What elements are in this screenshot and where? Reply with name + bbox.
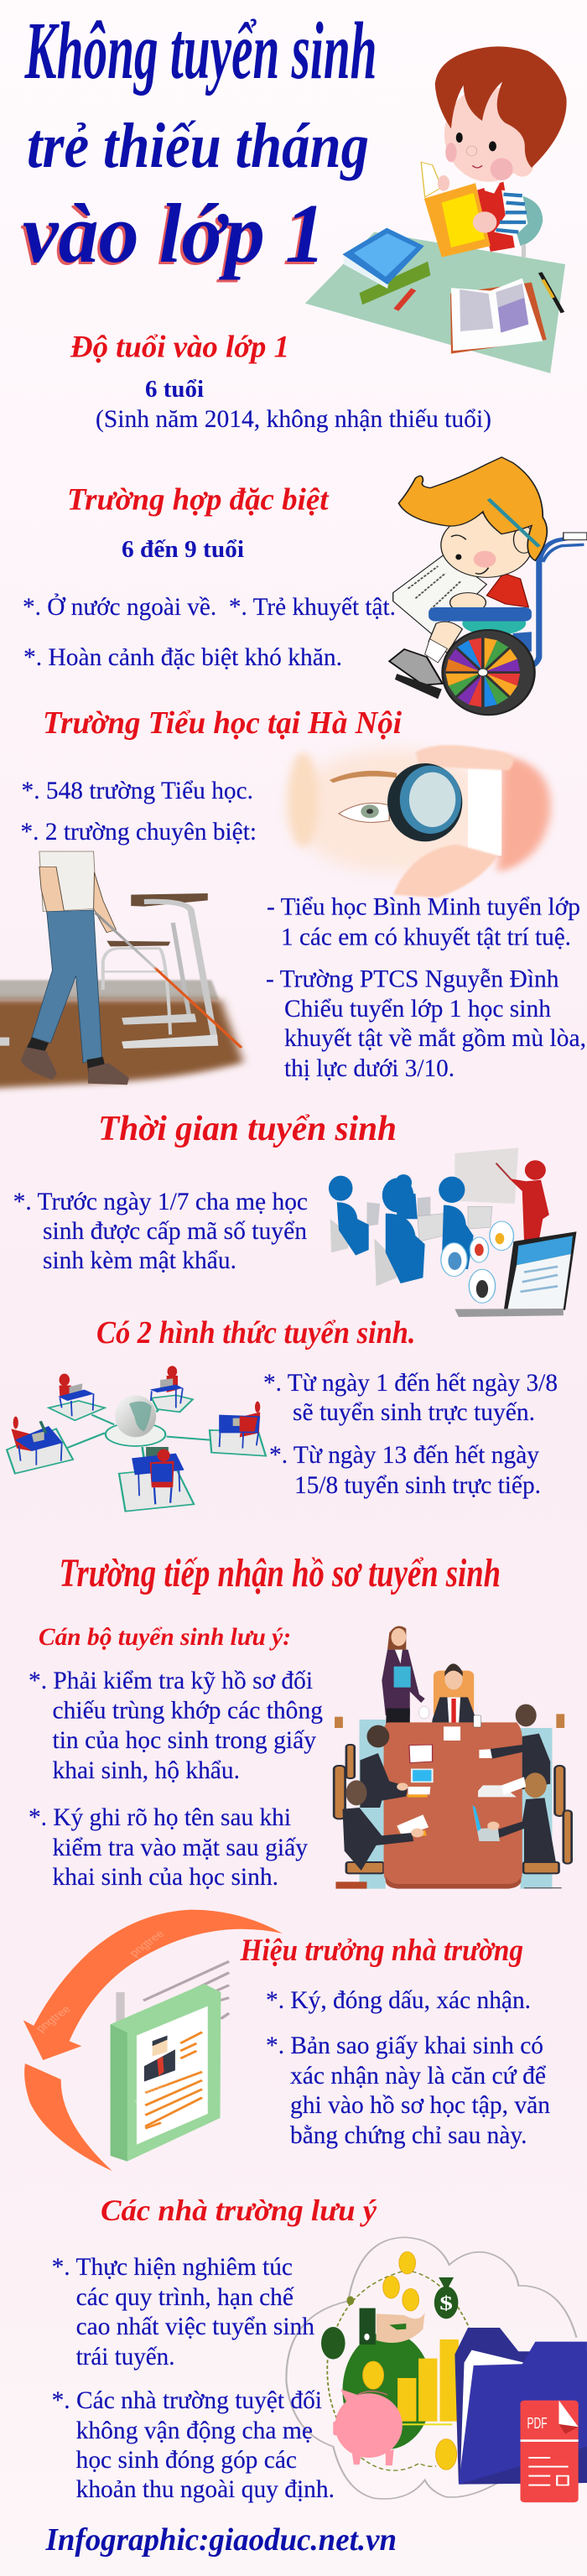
section: enrolment time xyxy=(13,1110,397,1274)
section: specialised schools list: - Trường PTCS Nguyễn Đình xyxy=(266,965,558,993)
section: enrolment officers note: tin của học sinh trong giấy xyxy=(52,1726,316,1754)
rainbow wheel spokes xyxy=(445,637,520,707)
section: enrolment officers note: kiểm tra vào mặt sau giấy xyxy=(52,1834,308,1861)
right desk xyxy=(219,1402,260,1449)
section: enrolment time: *. Trước ngày 1/7 cha mẹ học xyxy=(13,1188,308,1215)
section: schools note: học sinh đóng góp các xyxy=(76,2446,297,2474)
title: vào lớp 1 xyxy=(23,186,325,280)
top-left desk xyxy=(58,1374,94,1416)
section: two forms of enrolment xyxy=(96,1315,558,1499)
watermarks: pngtree xyxy=(127,1928,167,1959)
section: specialised schools list: Chiểu tuyển lớp 1 học sinh xyxy=(284,995,551,1023)
section: specialised schools list: - Tiểu học Bình Minh tuyển lớp xyxy=(267,893,580,921)
illustration: person walking with white cane xyxy=(0,851,243,1089)
section: enrolment officers note: *. Phải kiểm tra kỹ hồ sơ đối xyxy=(29,1667,313,1694)
section: schools note: cao nhất việc tuyển sinh xyxy=(76,2313,314,2340)
section: schools note: *. Các nhà trường tuyệt đối xyxy=(52,2386,322,2414)
bottom desk xyxy=(132,1447,184,1504)
PDF document icon: PDF xyxy=(527,2414,548,2432)
source credit: Infographic:giaoduc.net.vn xyxy=(45,2522,397,2558)
title: trẻ thiếu tháng xyxy=(27,111,369,181)
section: enrolment officers note: khai sinh của học sinh. xyxy=(52,1863,278,1891)
section: schools note: Các nhà trường lưu ý xyxy=(101,2194,377,2227)
illustration: eye with magnifying lens xyxy=(288,745,551,898)
section: two forms of enrolment: 15/8 tuyển sinh trực tiếp. xyxy=(294,1471,541,1499)
section: primary schools in Hanoi heading: *. 2 trường chuyên biệt: xyxy=(20,818,257,846)
section: primary schools in Hanoi heading xyxy=(20,705,402,846)
title xyxy=(23,6,377,280)
section: enrolment time: sinh được cấp mã số tuyển xyxy=(43,1217,307,1245)
standing woman with folder xyxy=(382,1626,425,1745)
section: primary schools in Hanoi heading: *. 548 trường Tiểu học. xyxy=(22,777,253,804)
section: schools note: *. Thực hiện nghiêm túc xyxy=(52,2253,293,2281)
section: special cases: 6 đến 9 tuổi xyxy=(122,537,244,563)
illustration: résumé document panel xyxy=(33,1928,229,2162)
section: enrolment officers note: Cán bộ tuyển sinh lưu ý: xyxy=(39,1623,291,1651)
man at head of the table xyxy=(430,1663,477,1736)
section: age for first grade: 6 tuổi xyxy=(145,377,204,403)
section: enrolment officers note: chiếu trùng khớp các thông xyxy=(52,1696,323,1725)
section: schools note: không vận động cha mẹ xyxy=(76,2417,313,2444)
section: special cases: Trường hợp đặc biệt xyxy=(67,483,330,518)
section: special cases xyxy=(23,483,396,671)
watermarks: pngtree xyxy=(33,2004,74,2034)
section: age for first grade: Độ tuổi vào lớp 1 xyxy=(70,330,289,365)
section: specialised schools list: thị lực dưới 3/10. xyxy=(284,1054,455,1082)
section: enrolment officers note: khai sinh, hộ khẩu. xyxy=(52,1756,240,1784)
section: age for first grade: (Sinh năm 2014, không nhận thiếu tuổi) xyxy=(96,405,491,433)
section: school principal: ghi vào hồ sơ học tập, văn xyxy=(290,2091,550,2119)
dollar sign: $ xyxy=(439,2292,453,2313)
section: specialised schools list xyxy=(266,893,586,1082)
section: schools note: khoản thu ngoài quy định. xyxy=(76,2475,335,2503)
illustration: money cloud and PDF folder xyxy=(286,2237,587,2502)
section: schools note: các quy trình, hạn chế xyxy=(76,2283,294,2311)
section: enrolment time: Thời gian tuyển sinh xyxy=(98,1110,397,1148)
section: specialised schools list: khuyết tật về mắt gồm mù lòa, xyxy=(284,1024,586,1052)
section: age for first grade xyxy=(70,330,491,433)
illustration: computers network around a globe xyxy=(7,1366,266,1512)
illustration: boy reading at a desk xyxy=(305,46,567,373)
section: two forms of enrolment: *. Từ ngày 13 đến hết ngày xyxy=(269,1441,539,1469)
section: schools note xyxy=(52,2194,377,2503)
section: school principal: Hiệu trưởng nhà trường xyxy=(240,1933,523,1968)
section: two forms of enrolment: Có 2 hình thức tuyển sinh. xyxy=(96,1315,416,1350)
illustration: blue figures in computer class xyxy=(329,1147,576,1317)
section: enrolment officers note: *. Ký ghi rõ họ tên sau khi xyxy=(29,1803,291,1831)
section: special cases: *. Ở nước ngoài về. *. Trẻ khuyết tật. xyxy=(23,593,396,621)
section: enrolment officers note xyxy=(29,1623,323,1891)
illustration: meeting around a table xyxy=(334,1626,572,1889)
PDF document icon xyxy=(520,2401,579,2502)
section: specialised schools list: 1 các em có khuyết tật trí tuệ. xyxy=(281,924,571,951)
top-right desk xyxy=(150,1366,184,1408)
right side people xyxy=(472,1704,556,1862)
section: school principal: bằng chứng chỉ sau này. xyxy=(290,2121,527,2149)
section: school principal xyxy=(240,1933,550,2149)
section: school principal: *. Ký, đóng dấu, xác nhận. xyxy=(266,1986,531,2014)
section: schools note: trái tuyến. xyxy=(76,2343,174,2370)
section: special cases: *. Hoàn cảnh đặc biệt khó khăn. xyxy=(23,643,342,671)
section: two forms of enrolment: *. Từ ngày 1 đến hết ngày 3/8 xyxy=(263,1369,558,1397)
section: school principal: *. Bản sao giấy khai sinh có xyxy=(266,2032,543,2059)
watermarks: pngtree xyxy=(131,2077,171,2107)
section: two forms of enrolment: sẽ tuyển sinh trực tuyến. xyxy=(293,1398,535,1426)
section: primary schools in Hanoi heading: Trường Tiểu học tại Hà Nội xyxy=(43,705,402,741)
left side people xyxy=(335,1725,423,1889)
illustration: curved orange arrow xyxy=(23,1910,283,2171)
section: enrolment time: sinh kèm mật khẩu. xyxy=(43,1246,236,1274)
left desk xyxy=(11,1417,63,1465)
illustration: child reading in wheelchair xyxy=(389,457,587,715)
section: school principal: xác nhận này là căn cứ để xyxy=(290,2062,547,2089)
watermarks xyxy=(33,1928,171,2107)
